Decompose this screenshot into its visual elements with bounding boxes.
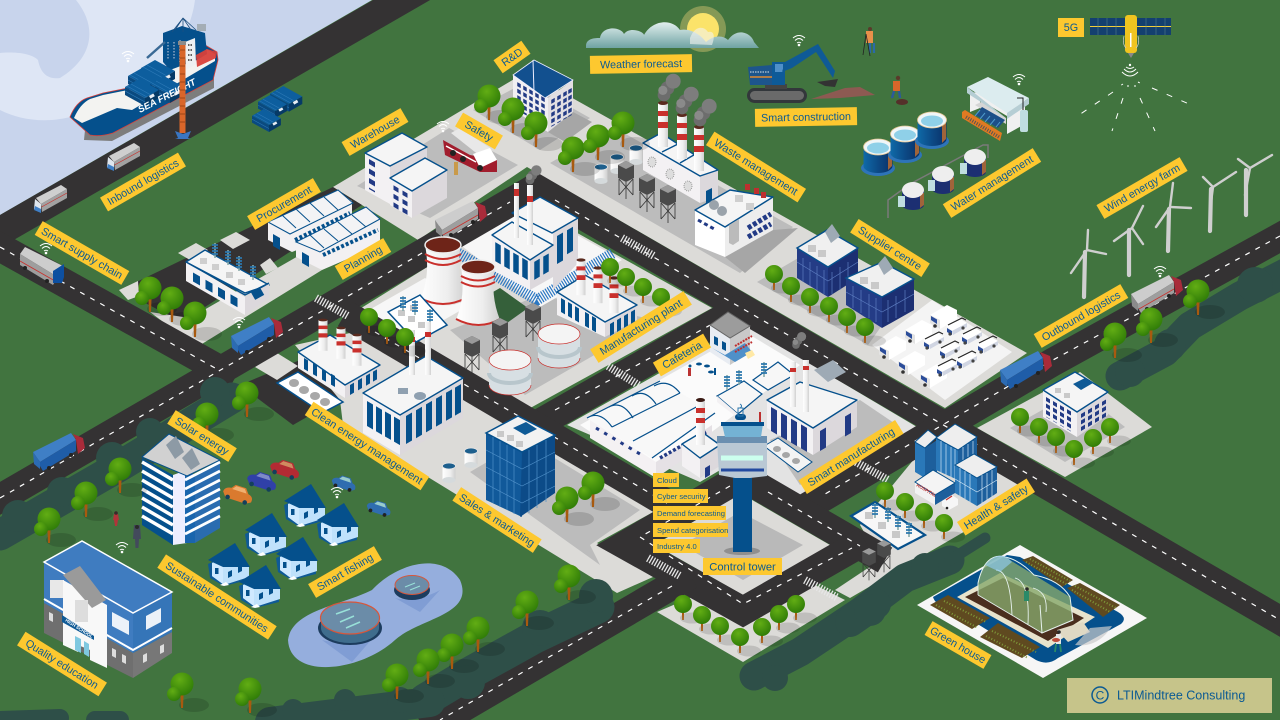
parked delivery vehicles <box>879 305 998 388</box>
label: Sustainable communities: Sustainable communities <box>163 560 271 636</box>
label: Weather forecast: Weather forecast <box>600 58 682 71</box>
harbour crane mast <box>175 41 191 139</box>
label: R&D: R&D <box>500 46 525 69</box>
main manufacturing plant <box>492 165 578 290</box>
label: Procurement: Procurement <box>255 184 314 225</box>
main manufacturing fence <box>458 253 613 300</box>
truck: blue lower lot <box>231 317 283 355</box>
plant substation <box>388 295 447 342</box>
cafeteria building <box>710 312 755 365</box>
greenhouse workers <box>1024 587 1061 652</box>
label: Industry 4.0: Industry 4.0 <box>657 542 697 551</box>
greenhouse structure <box>978 556 1073 633</box>
copyright badge: C <box>1096 688 1105 702</box>
label: Clean energy management: Clean energy management <box>309 406 425 487</box>
copyright badge: LTIMindtree Consulting <box>1117 688 1245 702</box>
label: Smart manufacturing: Smart manufacturing <box>806 426 897 489</box>
supplier centre building 2 <box>846 256 914 328</box>
label: Control tower: Control tower <box>709 562 776 574</box>
manufacturing plant secondary <box>557 258 637 337</box>
wifi: excavator <box>793 36 805 46</box>
wifi: ship <box>122 52 134 62</box>
sales tanks <box>442 448 478 483</box>
water treatment domes and pipe <box>888 145 988 218</box>
sales and marketing tower <box>486 416 555 517</box>
label: Quality education: Quality education <box>23 637 100 692</box>
label: Safety <box>455 113 503 149</box>
satellite <box>1090 15 1171 58</box>
shed 2 <box>296 207 380 270</box>
label: Spend categorisation <box>653 523 728 537</box>
water filter building <box>962 77 1029 141</box>
digger person <box>892 76 908 105</box>
label: Planning <box>335 238 391 280</box>
waste secondary building <box>695 184 773 257</box>
school entrance: HIGH SCHOOL <box>64 618 94 639</box>
label: Demand forecasting <box>653 506 726 520</box>
wifi: blue truck <box>233 318 245 328</box>
label: Cyber security: Cyber security <box>657 492 706 501</box>
city block: warehouse, R&D, waste, supplier <box>333 72 1027 408</box>
pale path <box>1057 622 1090 642</box>
water storage tanks <box>861 112 949 176</box>
label: 5G: 5G <box>1064 22 1078 34</box>
ship superstructure <box>147 18 217 70</box>
greenhouse site <box>917 545 1147 678</box>
label: Health & safety: Health & safety <box>962 483 1031 532</box>
wifi: supply chain <box>40 244 52 254</box>
ship containers <box>125 60 184 106</box>
health and safety block <box>835 430 1036 598</box>
waste water towers <box>618 161 676 223</box>
label: Procurement <box>247 178 321 230</box>
label: Green house: Green house <box>928 625 988 666</box>
label: Inbound logistics: Inbound logistics <box>106 157 182 208</box>
label: Warehouse: Warehouse <box>349 114 402 152</box>
label: 5G <box>1058 18 1084 37</box>
plant with chimney near tower <box>682 398 720 478</box>
label: Cafeteria: Cafeteria <box>660 339 704 372</box>
label: Spend categorisation: Spend categorisation <box>657 526 728 535</box>
city block: clean energy and sales <box>240 333 655 593</box>
excavator <box>747 44 875 103</box>
R&D building <box>513 60 573 132</box>
label: Industry 4.0 <box>653 539 700 553</box>
water towers near health block <box>862 540 891 580</box>
ship name: SEA FREIGHT <box>136 76 199 116</box>
label: Supplier centre: Supplier centre <box>856 224 924 273</box>
label: Sales & marketing: Sales & marketing <box>457 492 537 549</box>
truck: outbound gray <box>1131 275 1183 313</box>
fish cage small <box>394 576 430 600</box>
surveyor people <box>863 27 874 56</box>
city block: manufacturing plant <box>350 205 712 412</box>
satellite signal <box>1076 64 1196 131</box>
wifi: houses <box>331 488 343 498</box>
copyright badge <box>1067 678 1272 713</box>
label: Outbound logistics: Outbound logistics <box>1040 289 1123 344</box>
hospital right tower <box>955 454 997 506</box>
wifi: safety <box>437 122 449 132</box>
label: Waste management: Waste management <box>712 137 800 198</box>
hospital annex: HOSPITAL <box>916 483 938 498</box>
sustainable community houses <box>208 484 359 608</box>
storage tanks <box>489 324 580 395</box>
tree block south of control tower <box>657 585 845 662</box>
fish cage large <box>318 602 382 645</box>
cargo ship <box>70 18 218 141</box>
label: Warehouse <box>342 108 408 156</box>
label: Water management: Water management <box>949 153 1036 214</box>
truck: inbound bottom <box>34 185 67 213</box>
cars <box>221 457 393 518</box>
label: Cafeteria <box>653 334 711 376</box>
crop beds <box>930 556 1120 658</box>
smart manufacturing plant <box>767 332 857 455</box>
sea <box>0 0 372 215</box>
truck: inbound top <box>107 143 140 171</box>
small substations <box>717 362 794 418</box>
office block on the east <box>977 372 1152 477</box>
fire truck <box>443 128 497 175</box>
waste management plant <box>643 74 718 203</box>
supplier centre building 1 <box>797 224 858 297</box>
procurement warehouses <box>268 190 380 270</box>
weather forecast clouds and sun <box>586 6 759 52</box>
waste tanks <box>594 145 642 184</box>
wind turbines <box>1071 155 1272 297</box>
label: Safety: Safety <box>462 119 495 145</box>
truck: blue on west road <box>33 433 85 471</box>
label: Cyber security <box>653 489 708 503</box>
label: Smart supply chain: Smart supply chain <box>39 225 124 282</box>
label: Smart construction: Smart construction <box>761 111 851 124</box>
smart manufacturing fan pad <box>764 438 812 472</box>
cafeteria tables <box>688 362 716 376</box>
glass roof factory <box>587 381 715 478</box>
upper left parking lot <box>119 187 362 347</box>
wifi: outbound <box>1154 266 1166 277</box>
mfg water towers <box>464 303 541 374</box>
east office building <box>1043 372 1108 437</box>
label: Weather forecast <box>590 54 692 74</box>
cooling towers <box>420 237 500 326</box>
hospital back tower <box>915 430 937 478</box>
label: Smart fishing <box>308 546 382 598</box>
label: Smart construction <box>755 107 857 127</box>
clean energy plant 2 <box>363 322 463 455</box>
truck: gray centre <box>435 201 487 239</box>
label: Demand forecasting: Demand forecasting <box>657 509 725 518</box>
truck: smart supply chain <box>20 247 64 285</box>
tree belts <box>0 267 1280 720</box>
high school building <box>44 541 172 678</box>
label: Wind energy farm: Wind energy farm <box>1102 162 1182 215</box>
health and safety hospital <box>915 424 997 510</box>
substation building with coils <box>186 243 269 315</box>
shed 1 <box>268 190 353 252</box>
truck: blue outbound <box>1000 351 1052 389</box>
label: Cloud: Cloud <box>657 476 677 485</box>
stacked containers <box>252 86 302 132</box>
hospital centre tower <box>936 424 977 480</box>
smart community people <box>113 511 141 548</box>
label: Manufacturing plant: Manufacturing plant <box>598 297 685 358</box>
warehouse building <box>365 133 447 218</box>
label: Control tower <box>703 558 782 575</box>
label: Solar energy: Solar energy <box>172 415 231 458</box>
label: Solar energy <box>167 410 237 462</box>
solar energy tower <box>142 434 220 545</box>
label: Smart fishing: Smart fishing <box>315 552 376 594</box>
label: Cloud <box>653 473 679 487</box>
ambulance <box>942 495 958 510</box>
clean energy plant 1 <box>298 319 380 398</box>
substation near health block <box>851 502 925 549</box>
city block: smart manufacturing <box>567 325 917 495</box>
control tower plaza <box>655 493 830 595</box>
wifi: people <box>116 542 128 553</box>
clean energy fan pad <box>277 372 343 413</box>
wifi: filter <box>1013 74 1025 85</box>
control tower <box>717 404 767 555</box>
label: Planning: Planning <box>342 244 385 275</box>
label: R&D <box>493 41 531 73</box>
pond and smart fishing cages <box>288 563 463 667</box>
